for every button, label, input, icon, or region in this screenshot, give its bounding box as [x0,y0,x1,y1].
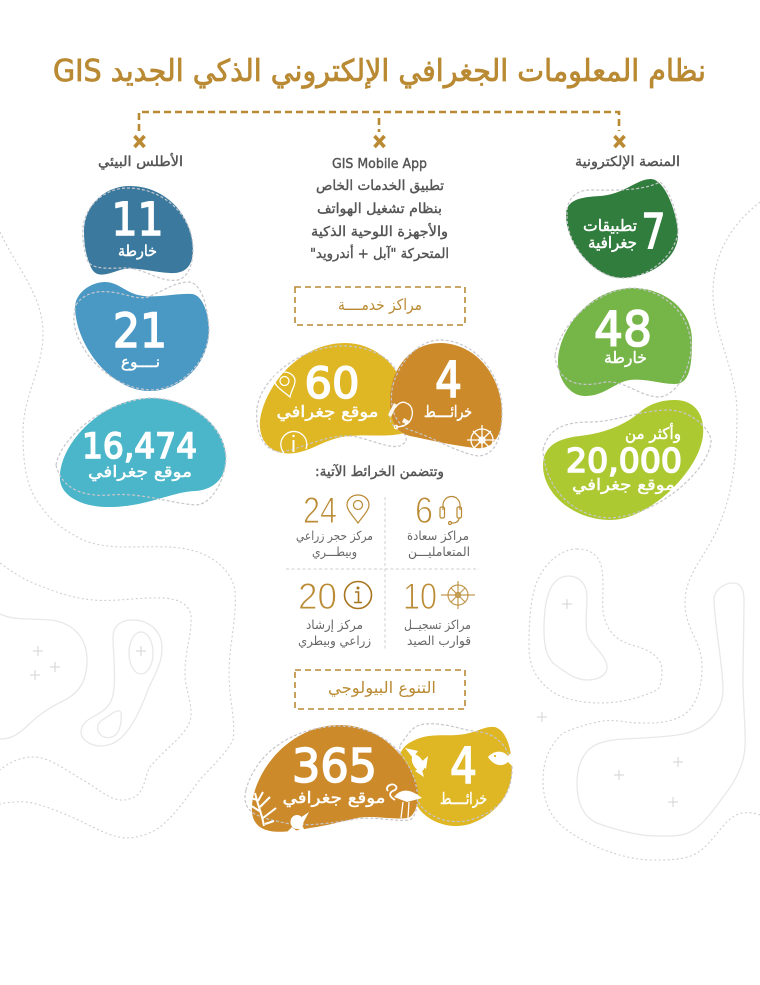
stat: customer happiness centers: المتعامليـــن [408,544,470,560]
blob: 4 maps [390,340,502,456]
blob: 4 maps: خرائــــط [424,402,472,422]
blob: 48 maps: خارطة [604,348,647,368]
blob: 48 maps: 48 [594,302,652,358]
stat: advisory centers: زراعي وبيطري [298,633,371,649]
icon: turtle [286,812,309,833]
icon: flamingo [387,784,422,818]
blob: 60 sites [257,343,408,453]
blob: 21 species [74,282,209,391]
icon: coral [250,792,276,826]
column heading: mobile app description: والأجهزة اللوحية الذكية [311,223,448,240]
stat: advisory centers: 20 [298,576,337,617]
blob: 48 maps [555,288,692,397]
blob: 20,000 sites: وأكثر من [625,423,681,444]
column heading: mobile app description: تطبيق الخدمات الخاص [316,178,444,194]
blob: 7 applications [566,179,678,278]
stat: customer happiness centers: مراكز سعادة [407,528,469,544]
blob: 16,474 sites [56,398,226,507]
icon: crab [405,748,428,777]
connector bracket [134,112,624,147]
blob: 20,000 sites: موقع جغرافي [572,475,675,495]
blob: 21 species: 21 [113,304,167,359]
stat: customer happiness centers [407,490,470,560]
blob: 16,474 sites: 16,474 [82,427,197,467]
stat: boat registration centers [403,576,475,649]
section label box: service centers [295,287,465,325]
section label box: biodiversity [295,670,465,709]
blob pair: biodiversity totals [245,724,512,833]
stat: boat registration centers: مراكز تسجيــل [404,617,471,633]
column heading: mobile app description [310,156,449,262]
stat: boat registration centers: 10 [403,576,437,617]
blob: 11 maps: خارطة [118,242,157,260]
blob: 365 sites: 365 [292,739,377,793]
column heading: environmental atlas: الأطلس البيئي [98,153,183,170]
stat: quarantine centers: وبيطـــري [312,544,357,560]
blob: 4 maps: 4 [435,351,462,409]
blob: 365 sites [245,725,418,832]
subheading: the maps include: وتتضمن الخرائط الآتية: [315,464,444,480]
blob: 7 applications: 7 [642,204,666,260]
column heading: mobile app description: المتحركة "آبل + أندرويد" [310,244,449,262]
blob: 11 maps [83,186,193,280]
section label box: service centers: مراكز خدمــــة [338,296,422,314]
stat: customer happiness centers: 6 [415,490,433,531]
column heading: electronic platform: المنصة الإلكترونية [575,154,680,170]
blob: 4 maps: 4 [450,737,477,795]
stat: quarantine centers [296,490,373,560]
stat: boat registration centers: قوارب الصيد [407,633,471,649]
title: نظام المعلومات الجغرافي الإلكتروني الذكي الجديد GIS [53,54,706,89]
stat: advisory centers [298,576,372,649]
column heading: mobile app description: GIS Mobile App [332,156,427,172]
column heading: mobile app description: بنظام تشغيل الهواتف [317,201,442,217]
blob pair: service centers totals [257,340,502,456]
icon: headset [388,402,412,429]
blob: 7 applications: تطبيقات [583,216,637,235]
section label box: biodiversity: التنوع البيولوجي [328,679,436,698]
blob: 7 applications: جغرافية [588,233,637,253]
blob: 4 maps: خرائــــط [440,789,487,809]
background contour map [0,202,760,860]
blob: 16,474 sites: موقع جغرافي [88,462,192,482]
icon: ship wheel [467,425,497,453]
blob: 21 species: نــــوع [121,353,160,371]
stat: quarantine centers: 24 [303,490,337,531]
blob: 20,000 sites: 20,000 [566,441,682,480]
blob: 60 sites: 60 [304,359,360,409]
blob: 60 sites: موقع جغرافي [276,402,378,422]
stats grid [286,490,479,650]
icon: fish [488,752,512,766]
stat: advisory centers: مركز إرشاد [306,617,363,633]
blob: 4 maps [399,724,512,826]
blob: 365 sites: موقع جغرافي [282,788,386,808]
blob: 11 maps: 11 [112,193,164,246]
icon: location pin [274,372,295,397]
stat: quarantine centers: مركز حجر زراعي [296,528,373,544]
icon: info [281,431,307,453]
blob: 20,000 sites [543,400,711,520]
